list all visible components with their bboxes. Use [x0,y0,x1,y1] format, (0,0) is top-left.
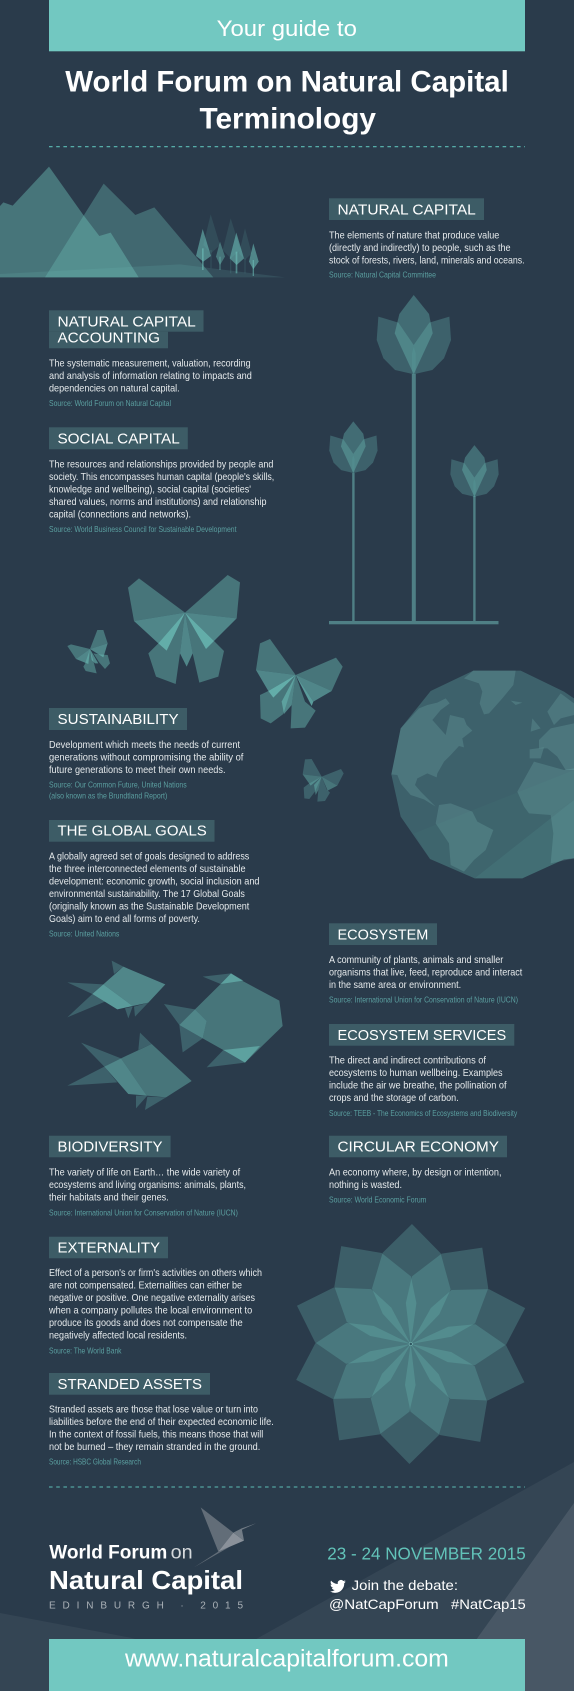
logo: world forum on natural capital: on [171,1542,193,1563]
heading: circular economy [329,1136,507,1157]
definition text: nothing is wasted. [329,1179,402,1191]
definition text: ecosystems and living organisms: animals, plants, [49,1179,246,1191]
definition text [329,229,525,266]
logo: world forum on natural capital: World Forum [49,1542,167,1563]
definition text: development: economic growth, social inclusion and [49,876,260,888]
heading: the global goals [49,820,214,842]
source [49,780,187,801]
definition text: The direct and indirect contributions of [329,1055,486,1067]
heading: stranded assets: STRANDED ASSETS [58,1377,202,1393]
heading: social capital: SOCIAL CAPITAL [58,431,180,447]
title: Terminology [200,103,376,136]
butterfly: large [128,575,240,684]
source: Source: World Business Council for Sustainable Development [49,525,237,534]
definition text: The variety of life on Earth… the wide variety of [49,1167,240,1179]
definition text [49,851,260,925]
definition text: negatively affected local residents. [49,1330,187,1342]
heading: externality: EXTERNALITY [58,1241,160,1257]
definition text: Effect of a person's or firm's activities on others which [49,1267,262,1279]
definition text: A globally agreed set of goals designed to address [49,851,249,863]
definition text: society. This encompasses human capital (people's skills, [49,471,274,483]
definition text: include the air we breathe, the pollination of [329,1080,507,1092]
illustration: geometric flower [284,1223,537,1465]
definition text: environmental sustainability. The 17 Global Goals [49,888,245,900]
icon: twitter bird [330,1580,346,1593]
logo: world forum on natural capital: EDINBURGH · 2015 [49,1600,243,1611]
source: Source: United Nations [49,930,119,939]
definition text [49,357,252,394]
definition text: In the context of fossil fuels, this means those that will [49,1428,263,1440]
social handles: #NatCap15 [451,1596,526,1612]
heading: sustainability: SUSTAINABILITY [58,712,179,728]
definition text: The resources and relationships provided by people and [49,458,274,470]
definition text: The elements of nature that produce value [329,229,499,241]
definition text: A community of plants, animals and smaller [329,954,504,966]
heading: natural capital accounting [49,310,204,348]
panel: natural capital [329,198,525,280]
definition text: generations without compromising the ability of [49,752,243,764]
illustration: butterflies [67,575,344,802]
definition text: the three interconnected elements of sustainable [49,863,246,875]
heading: ecosystem services: ECOSYSTEM SERVICES [338,1028,506,1044]
definition text: Stranded assets are those that lose value or turn into [49,1403,258,1415]
heading: natural capital [329,198,484,220]
definition text: knowledge and wellbeing), social capital (societies' [49,483,251,495]
panel: biodiversity [49,1136,246,1217]
source: Source: TEEB - The Economics of Ecosystems and Biodiversity [329,1109,518,1118]
definition text: are not compensated. Externalities can either be [49,1280,242,1292]
logo: world forum on natural capital [49,1507,256,1611]
source: Source: International Union for Conservation of Nature (IUCN) [329,996,518,1005]
heading: the global goals: THE GLOBAL GOALS [58,823,207,839]
definition text [49,1403,274,1453]
bottom banner: website: www.naturalcapitalforum.com [124,1646,449,1673]
source: Source: Natural Capital Committee [329,271,436,280]
heading: ecosystem [329,923,437,945]
panel: natural capital accounting [49,310,252,408]
background rays [0,1462,574,1691]
icon: origami bird [194,1507,256,1567]
definition text: future generations to meet their own needs. [49,764,226,776]
title: World Forum on Natural Capital [65,66,509,99]
source: Source: International Union for Conservation of Nature (IUCN) [49,1208,238,1217]
source: Source: HSBC Global Research [49,1458,141,1467]
definition text [49,739,243,776]
source: Source: Our Common Future, United Nations [49,780,187,789]
definition text: (directly and indirectly) to people, such as the [329,242,511,254]
definition text: crops and the storage of carbon. [329,1092,459,1104]
heading: circular economy: CIRCULAR ECONOMY [338,1140,499,1156]
panel: the global goals [49,820,260,939]
definition text [48,1267,262,1342]
social handles [329,1577,526,1612]
heading: ecosystem services [329,1024,514,1046]
social handles: Join the debate: [352,1577,458,1593]
definition text: their habitats and their genes. [49,1192,169,1204]
heading: natural capital accounting: ACCOUNTING [58,330,160,346]
heading: biodiversity [49,1136,171,1157]
definition text: shared values, norms and institutions) and relationship [49,496,267,508]
social handles: @NatCapForum [329,1596,439,1612]
heading: ecosystem: ECOSYSTEM [338,927,428,943]
fish: right [164,973,283,1067]
definition text: and analysis of information relating to impacts and [49,370,252,382]
definition text: capital (connections and networks). [49,508,191,520]
heading: stranded assets [49,1373,210,1395]
panel: ecosystem services [329,1024,518,1118]
bottom banner: website [49,1639,525,1691]
definition text: Development which meets the needs of current [49,739,240,751]
heading: biodiversity: BIODIVERSITY [58,1140,163,1156]
panel: stranded assets [49,1373,274,1467]
definition text: negative or positive. One negative externality arises [49,1292,255,1304]
illustration: fish [67,961,283,1110]
top banner: Your guide to [217,16,357,41]
definition text: produce its goods and does not compensate the [49,1317,243,1329]
source: Source: The World Bank [49,1346,122,1355]
illustration: globe [391,671,574,878]
definition text: liabilities before the end of their expected economic life. [49,1416,274,1428]
definition text: when a company pollutes the local environment to [48,1304,252,1316]
logo: world forum on natural capital: Natural Capital [49,1565,243,1595]
panel: social capital [49,427,274,534]
butterfly: small left [67,630,110,673]
panel: externality [48,1237,262,1355]
heading: natural capital accounting: NATURAL CAPITAL [58,314,196,330]
definition text [329,954,522,991]
definition text: ecosystems to human wellbeing. Examples [329,1067,503,1079]
heading: externality [49,1237,168,1258]
butterfly: small right [303,759,344,802]
heading: natural capital: NATURAL CAPITAL [338,202,476,218]
definition text: in the same area or environment. [329,979,461,991]
definition text: Goals) aim to end all forms of poverty. [49,913,200,925]
definition text: not be burned – they remain stranded in the ground. [49,1441,260,1453]
heading: social capital [49,427,188,449]
source: (also known as the Brundtland Report) [49,792,168,801]
panel: ecosystem [329,923,522,1005]
panel: circular economy [329,1136,507,1205]
illustration: plants [329,295,499,624]
source: Source: World Economic Forum [329,1196,427,1205]
event date: 23 - 24 NOVEMBER 2015 [327,1543,526,1563]
butterfly: right [256,639,343,728]
fish: top left [67,961,165,1018]
panel: sustainability [49,708,243,801]
definition text [49,1167,246,1204]
definition text: The systematic measurement, valuation, recording [49,357,251,369]
title [65,66,509,136]
top banner [49,0,525,51]
definition text: (originally known as the Sustainable Development [49,901,249,913]
source: Source: World Forum on Natural Capital [49,399,171,408]
definition text [329,1167,502,1191]
heading: sustainability [49,708,187,730]
illustration: mountains and trees [0,167,285,277]
definition text: organisms that live, feed, reproduce and interact [329,966,522,978]
definition text: stock of forests, rivers, land, minerals and oceans. [329,254,525,266]
definition text [49,458,274,520]
definition text [329,1055,507,1104]
definition text: dependencies on natural capital. [49,382,180,394]
definition text: An economy where, by design or intention, [329,1167,502,1179]
fish: bottom [67,1033,192,1110]
